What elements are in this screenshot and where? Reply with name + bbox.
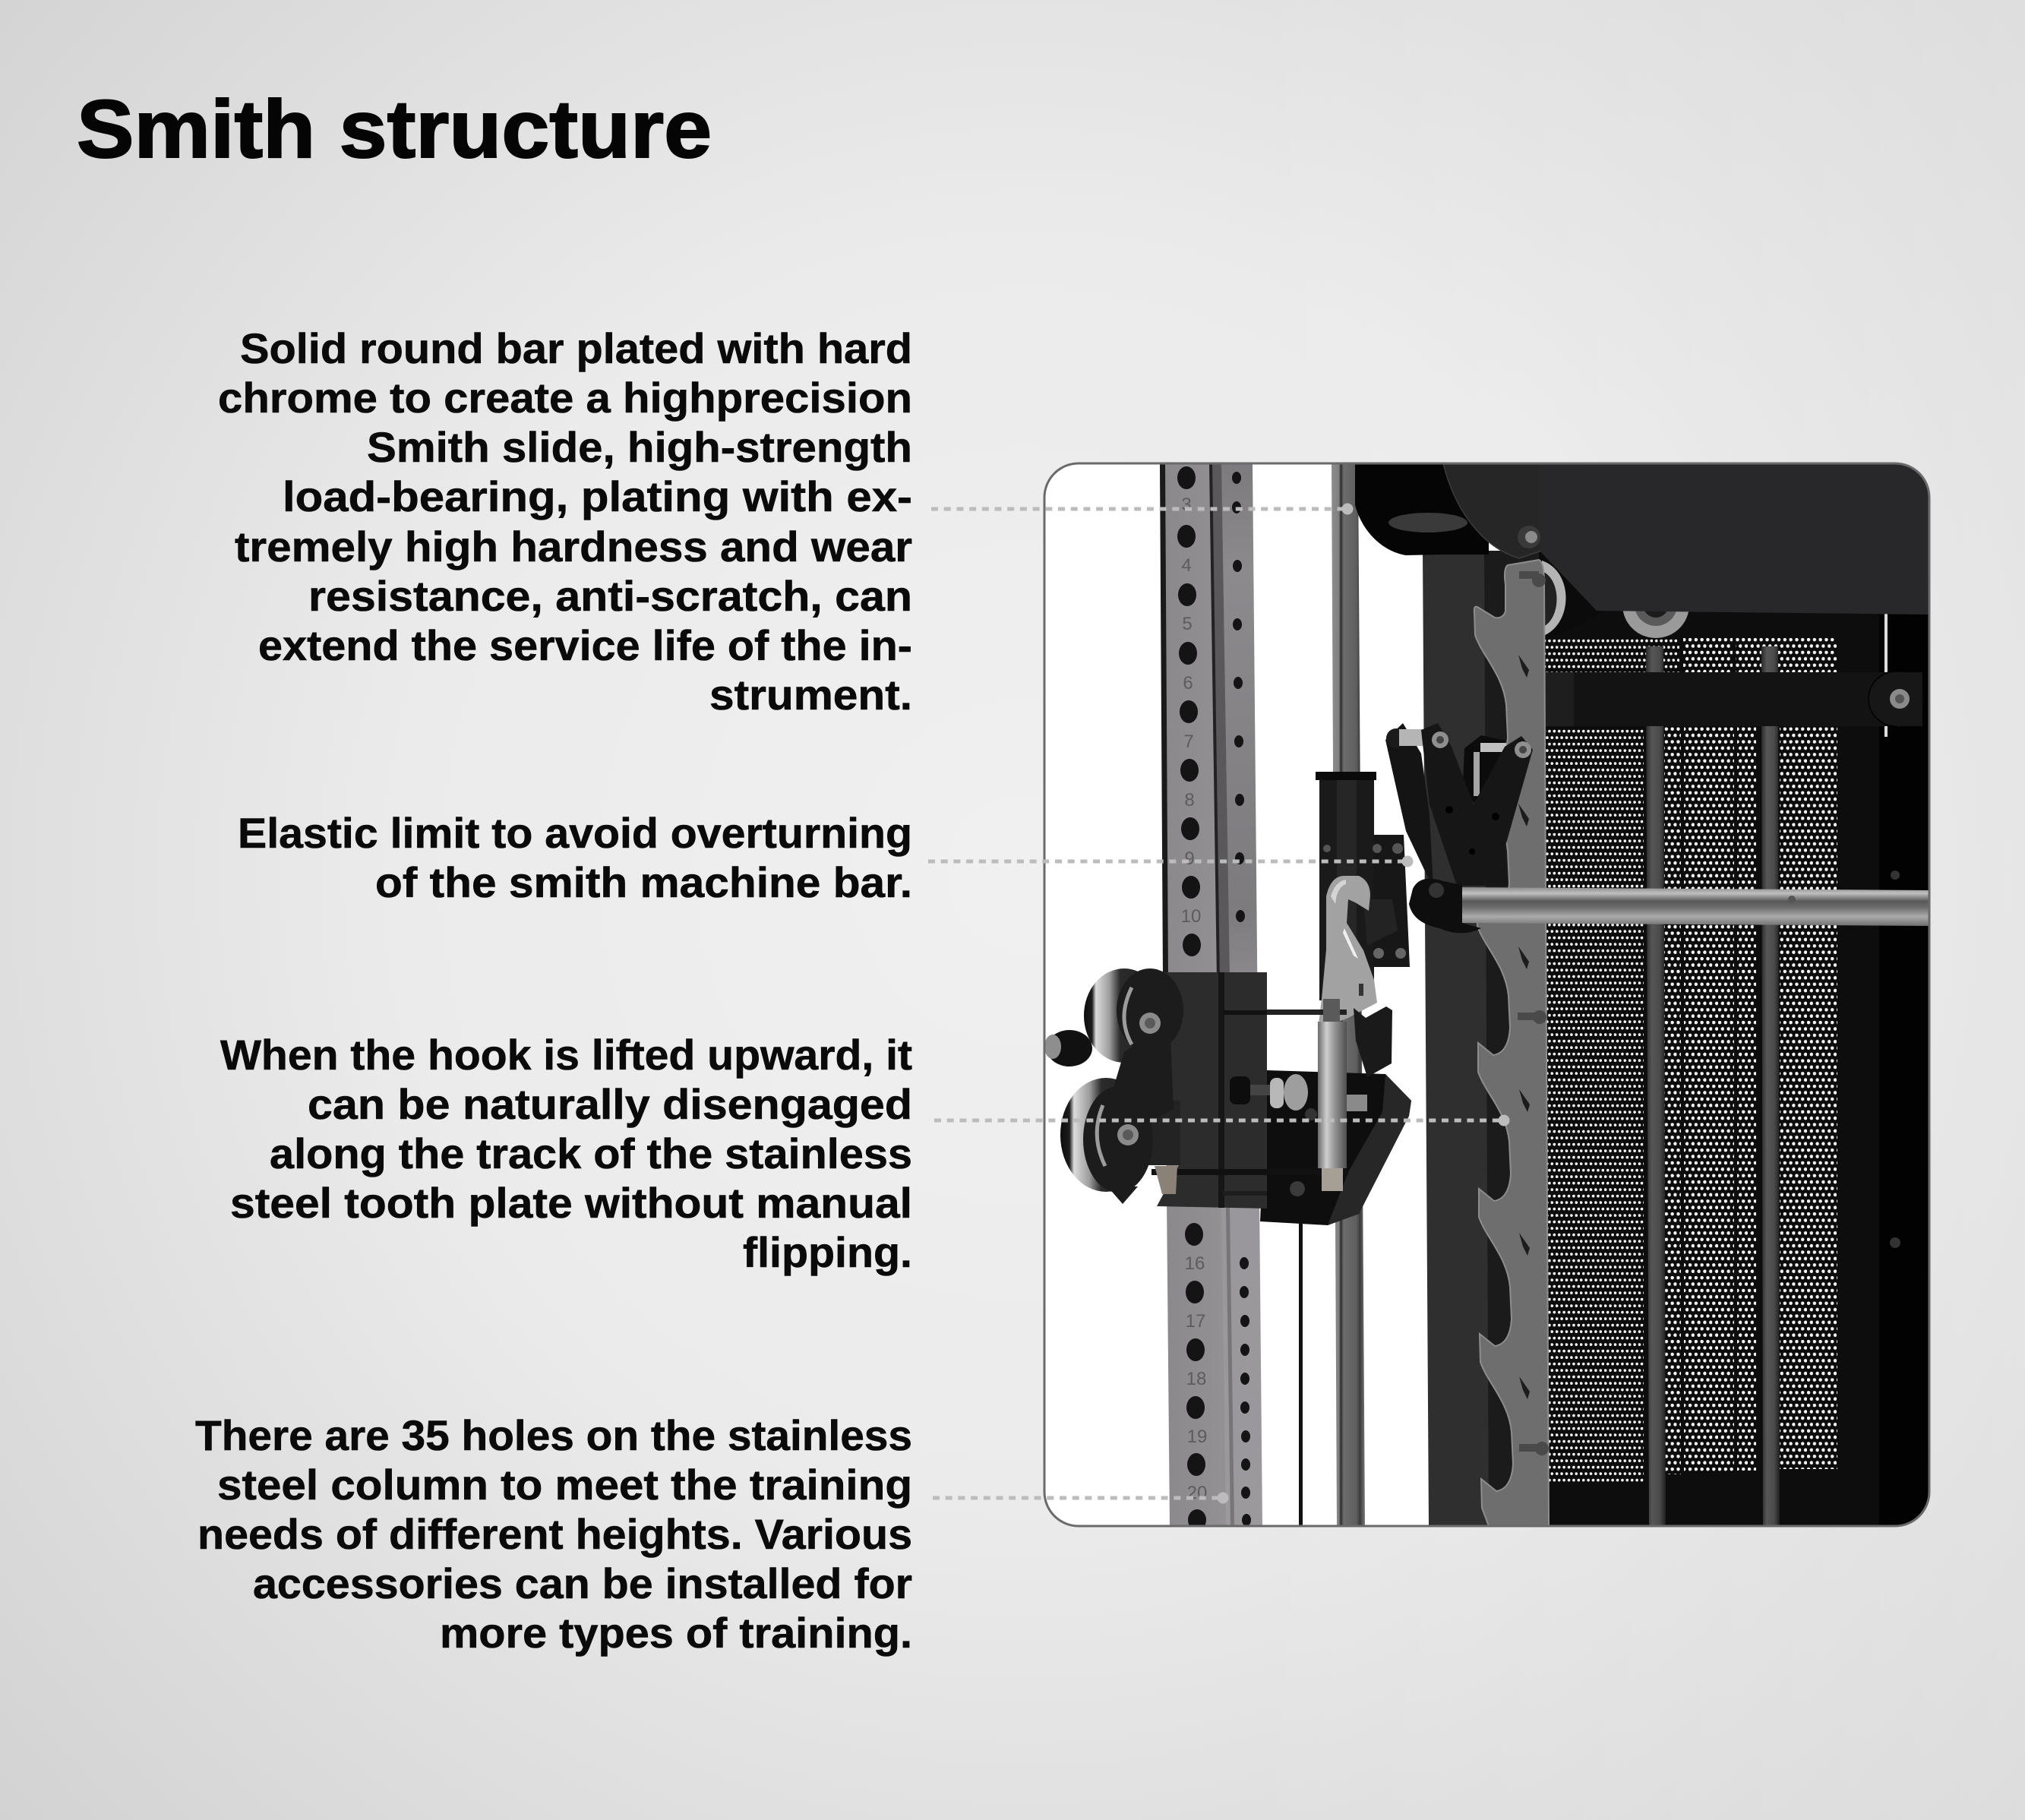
stainless steel column: 4	[1181, 555, 1192, 576]
stainless steel column	[1160, 463, 1262, 1531]
stainless steel column: 8	[1184, 790, 1195, 810]
stainless steel column: 17	[1186, 1311, 1205, 1332]
stainless steel column: 3	[1181, 494, 1192, 515]
text block: hook: When the hook is lifted upward, it	[220, 1031, 912, 1079]
mounting base	[1363, 835, 1410, 967]
crossbar	[1544, 671, 1923, 726]
text block: solid round bar	[218, 324, 912, 719]
side knob	[1044, 1030, 1092, 1066]
text block: 35 holes: steel column to meet the training	[217, 1461, 912, 1509]
text block: hook: along the track of the stainless	[270, 1130, 912, 1177]
panel outline	[1044, 463, 1929, 1526]
text block: hook: steel tooth plate without manual	[230, 1179, 912, 1227]
text block: elastic limit: of the smith machine bar.	[375, 858, 912, 906]
text block: solid round bar: load-bearing, plating with ex-	[283, 472, 912, 520]
text block: solid round bar: Solid round bar plated with hard	[240, 324, 912, 372]
title: Smith structure	[77, 83, 712, 175]
text block: elastic limit	[238, 809, 912, 906]
stainless steel column: 10	[1181, 906, 1201, 927]
bottom pulley	[1622, 611, 1689, 638]
leader line: tooth plate	[934, 1115, 1510, 1126]
top shroud plate	[1355, 463, 1929, 615]
stainless steel column: 5	[1182, 614, 1193, 634]
text block: solid round bar: resistance, anti-scratch, can	[308, 572, 912, 620]
text block: 35 holes: There are 35 holes on the stainless	[195, 1411, 912, 1459]
text block: 35 holes: more types of training.	[440, 1609, 912, 1657]
text block: solid round bar: strument.	[709, 671, 912, 719]
guide rail	[1299, 463, 1365, 1526]
text block: solid round bar: Smith slide, high-strength	[367, 423, 912, 471]
rear frame background	[1542, 600, 1929, 1526]
stainless steel column: 9	[1184, 848, 1195, 869]
dark frame column	[1423, 551, 1550, 1526]
stainless steel column: 6	[1183, 673, 1193, 694]
perforated mesh panels	[1545, 637, 1837, 1484]
stainless steel column: 7	[1183, 731, 1194, 752]
text block: hook: flipping.	[743, 1228, 912, 1276]
stainless steel column: 19	[1187, 1427, 1207, 1447]
leader line: solid bar	[931, 503, 1354, 515]
pulley wheels	[1060, 968, 1183, 1204]
elastic limit V plate	[1385, 723, 1533, 889]
barbell	[1409, 879, 1929, 933]
carriage bracket	[1260, 1070, 1411, 1225]
leader line: elastic limit	[928, 855, 1413, 867]
vertical posts	[1646, 611, 1900, 1526]
hook	[1318, 876, 1377, 1030]
text block: 35 holes	[195, 1411, 912, 1657]
text block: solid round bar: tremely high hardness and wear	[235, 523, 912, 570]
text block: elastic limit: Elastic limit to avoid overturning	[238, 809, 912, 857]
carriage block on column	[1152, 972, 1348, 1209]
tooth plate	[1474, 560, 1549, 1526]
bar holder tube	[1316, 772, 1376, 1000]
text block: 35 holes: accessories can be installed for	[253, 1559, 912, 1607]
stainless steel column: 16	[1185, 1253, 1205, 1274]
silver cylinder	[1318, 999, 1347, 1191]
leader line: column holes	[933, 1492, 1229, 1504]
text block: solid round bar: extend the service life of the in-	[258, 621, 912, 669]
text block: hook: can be naturally disengaged	[308, 1080, 912, 1128]
latch	[1354, 1006, 1392, 1077]
text block: solid round bar: chrome to create a highprecision	[218, 374, 912, 422]
text block: 35 holes: needs of different heights. Various	[197, 1510, 912, 1558]
stainless steel column: 20	[1187, 1483, 1207, 1503]
rear frame right strip	[1879, 615, 1929, 1526]
upper ring pulley	[1539, 551, 1587, 640]
text block: hook	[220, 1031, 912, 1276]
plunger pin	[1230, 1074, 1367, 1111]
panel: machine illustration	[1044, 463, 1929, 1531]
stainless steel column: 18	[1186, 1369, 1206, 1389]
